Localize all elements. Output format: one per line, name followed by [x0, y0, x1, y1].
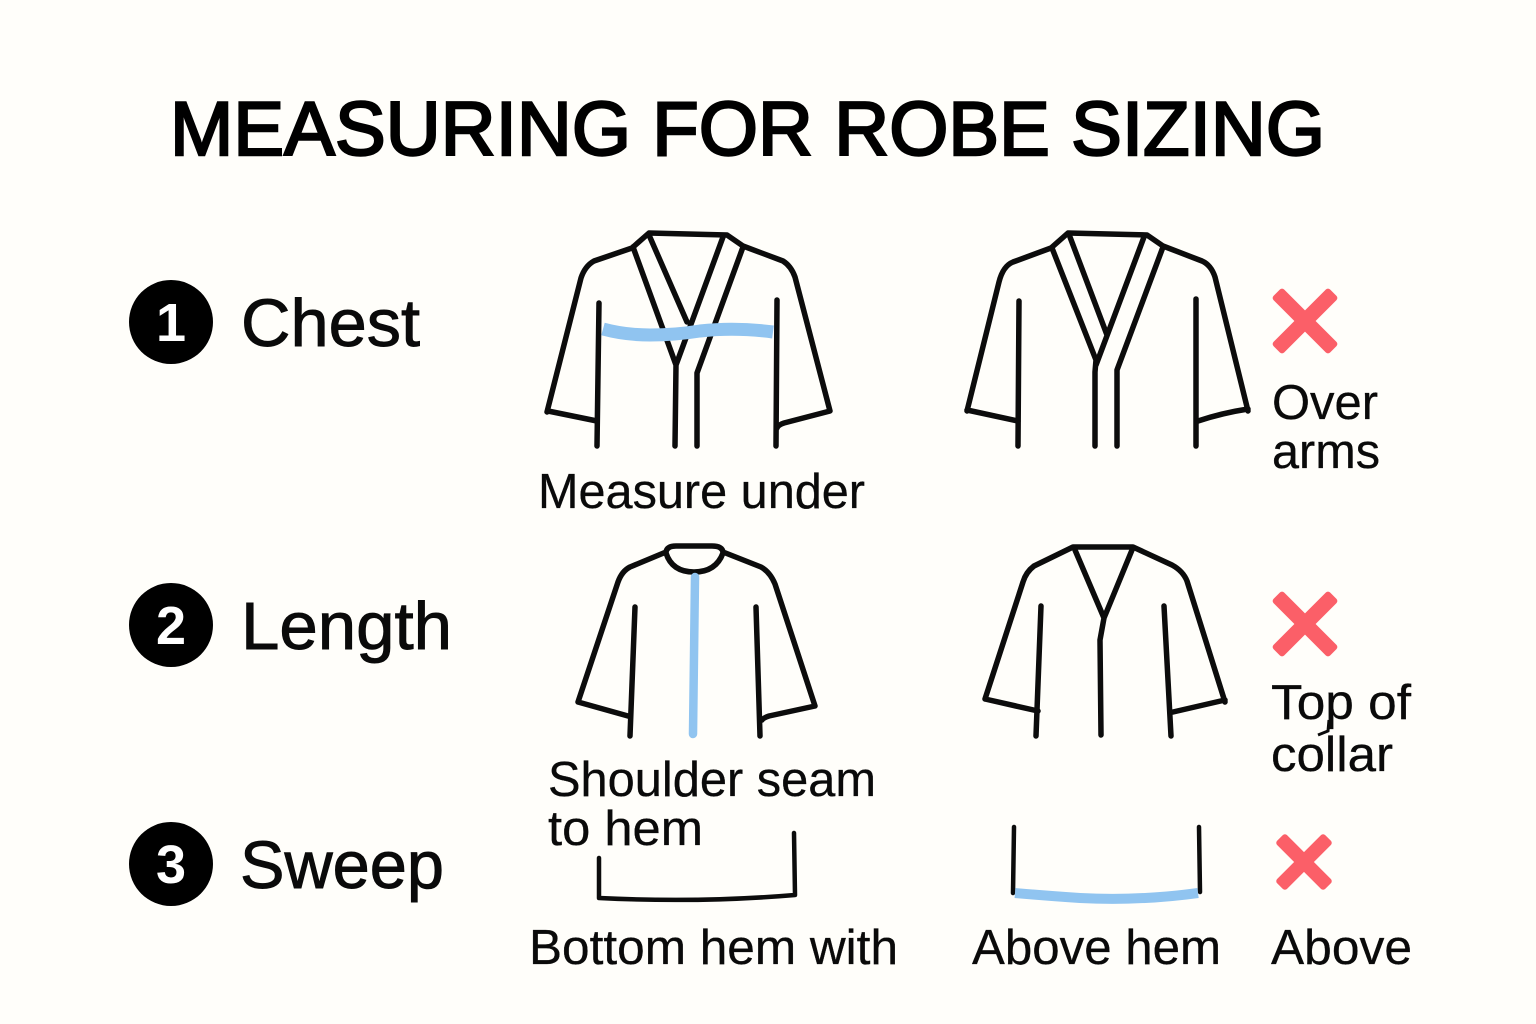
caption: measure under: Measure under	[538, 465, 865, 519]
caption: shoulder seam to hem: to hem	[548, 802, 703, 856]
robe: length wrong	[985, 547, 1225, 736]
caption: shoulder seam to hem	[548, 753, 876, 856]
caption: bottom hem with: Bottom hem with	[529, 921, 898, 975]
robe: chest correct	[547, 233, 830, 446]
step 1: Chest heading: 1	[156, 293, 186, 353]
caption: over arms	[1272, 376, 1380, 479]
step 3: Sweep heading: Sweep	[240, 828, 444, 903]
step 3: Sweep heading	[129, 822, 444, 906]
hem: sweep correct	[599, 833, 795, 900]
caption: top of collar: Top of	[1271, 676, 1411, 730]
hem: sweep wrong	[1013, 827, 1200, 899]
title: MEASURING FOR ROBE SIZING	[170, 87, 1325, 172]
icon: red cross sweep	[1275, 833, 1333, 891]
step 3: Sweep heading: 3	[156, 835, 186, 895]
step 2: Length heading	[129, 583, 452, 667]
caption: shoulder seam to hem: Shoulder seam	[548, 753, 876, 807]
blue chest measure line	[603, 329, 773, 335]
caption: over arms: Over	[1272, 376, 1378, 430]
caption: above: Above	[1271, 921, 1412, 975]
step 2: Length heading: 2	[156, 596, 186, 656]
icon: red cross chest	[1271, 287, 1339, 355]
blue length measure line	[693, 577, 695, 734]
robe: chest wrong	[967, 233, 1248, 446]
step 1: Chest heading	[129, 280, 420, 364]
caption: above hem: Above hem	[972, 921, 1221, 975]
blue sweep measure line	[1015, 893, 1198, 899]
caption: top of collar: collar	[1271, 728, 1393, 782]
caption: over arms: arms	[1272, 425, 1380, 479]
caption: top of collar	[1271, 676, 1411, 782]
icon: red cross length	[1271, 590, 1339, 658]
step 2: Length heading: Length	[241, 589, 452, 664]
step 1: Chest heading: Chest	[241, 286, 420, 361]
robe: length correct	[578, 546, 815, 736]
